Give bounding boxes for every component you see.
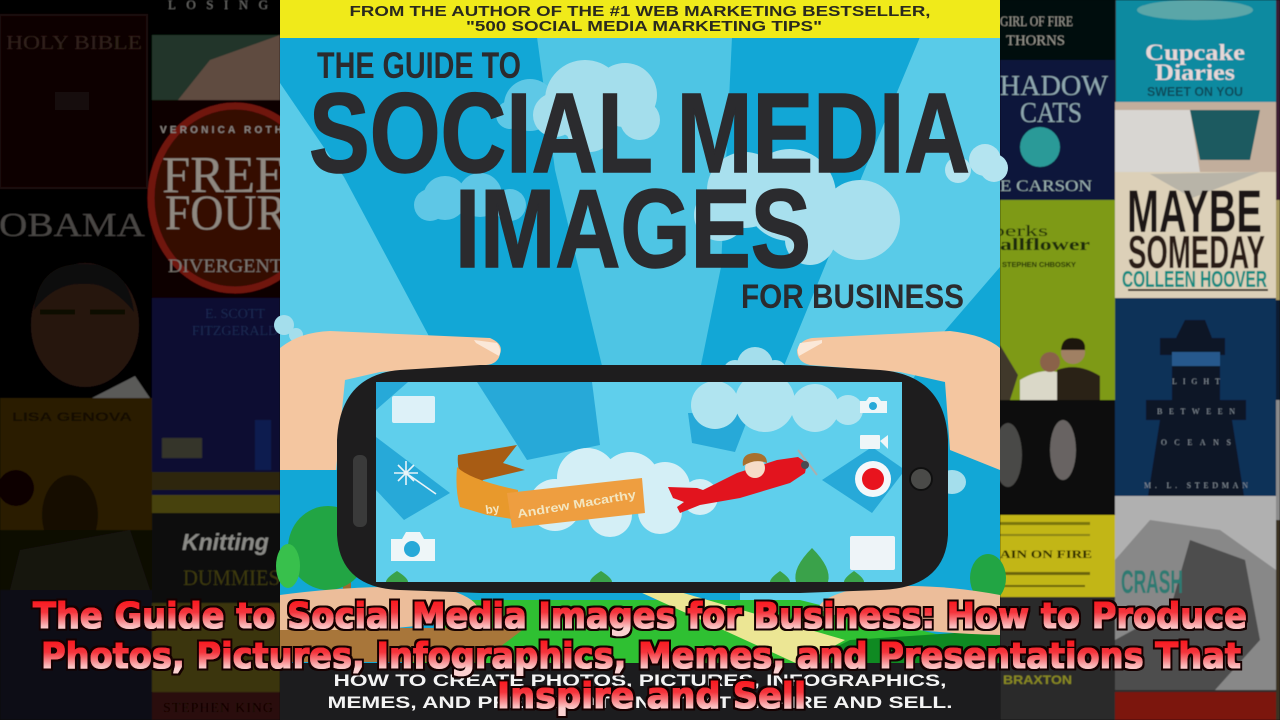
book: Knitting for Dummies [152, 495, 280, 603]
screen icon: folder [392, 396, 435, 423]
right hand [797, 331, 1000, 635]
book: lower left dark cover [0, 590, 152, 720]
cover banner: yellow endorsement: "500 SOCIAL MEDIA MARKETING TIPS" [466, 19, 822, 35]
cover title: Images: IMAGES [455, 167, 811, 291]
book: Perks of Being a Wallflower: STEPHEN CHBOSKY [1002, 262, 1076, 269]
banner: by Andrew Macarthy [456, 445, 645, 528]
book: navy novel: FITZGERALD [192, 324, 278, 339]
book: navy novel [152, 298, 280, 495]
book: Rain on Fire: AIN ON FIRE [1000, 547, 1092, 561]
book: Free Four: VERONICA ROTH [160, 125, 282, 136]
screen icon: magic wand [394, 461, 436, 494]
book: Free Four: DIVERGENT [168, 256, 282, 277]
banner: by Andrew Macarthy: by [484, 501, 501, 517]
icon: background trees [276, 470, 1006, 602]
cover banner: yellow endorsement: FROM THE AUTHOR OF THE #1 WEB MARKETING BESTSELLER, [350, 4, 930, 20]
book: The Light Between Oceans: BETWEEN [1157, 407, 1235, 416]
cover footer band [280, 663, 1000, 720]
cover footer band: HOW TO CREATE PHOTOS, PICTURES, INFOGRAPHICS, [334, 671, 946, 690]
book: Cupcake Diaries: SWEET ON YOU [1147, 84, 1243, 99]
book: Stephen King: STEPHEN KING [163, 701, 273, 716]
book: Obama: OBAMA [0, 207, 146, 244]
cloud: left edge [274, 315, 303, 342]
cover title: Social Media: SOCIAL MEDIA [309, 70, 970, 196]
cover sky with sun rays [280, 38, 1000, 575]
book: Cupcake Diaries: Diaries [1155, 60, 1235, 85]
book: Maybe Someday [1115, 102, 1277, 298]
book: Holy Bible: HOLY BIBLE [6, 32, 142, 54]
screen cloud: top right [691, 382, 863, 432]
book: navy novel: E. SCOTT [205, 307, 265, 322]
panel: left book wall [0, 0, 319, 720]
screen icon: camera left [391, 532, 435, 561]
screen icon: camera right [860, 397, 887, 413]
cloud: right edge [945, 144, 1008, 183]
book: Knitting for Dummies: DUMMIES [183, 565, 280, 590]
book: Rain on Fire [1000, 515, 1115, 597]
book: The Light Between Oceans: LIGHT [1172, 377, 1220, 386]
screen icon: record button [855, 461, 891, 497]
book: The Light Between Oceans: M. L. STEDMAN [1144, 481, 1248, 490]
book: Free Four [151, 100, 319, 298]
book: Shadow Cats: GIRL OF FIRE [1000, 14, 1073, 30]
cover title: For Business: FOR BUSINESS [741, 278, 964, 316]
video caption title: Inspire and Sell [497, 676, 806, 717]
book: The Light Between Oceans: OCEANS [1161, 438, 1231, 447]
video caption title [33, 596, 1247, 717]
book: Shadow Cats: E CARSON [1000, 178, 1093, 195]
cloud: behind Social [496, 60, 660, 152]
book: Shadow Cats: CATS [1020, 98, 1082, 129]
screen cloud: centre [529, 448, 718, 537]
book: Perks of Being a Wallflower: perks [992, 223, 1048, 240]
book: Knitting for Dummies: Knitting [182, 529, 269, 555]
left hand [280, 331, 501, 630]
book: Lisa Genova [0, 398, 152, 590]
plane with pilot [668, 450, 817, 513]
cloud: behind Images [694, 149, 900, 265]
cloud: behind phone top right [723, 347, 787, 384]
book: Crash [1115, 496, 1276, 690]
book: Braxton [1000, 597, 1115, 720]
book: Braxton: BRAXTON [1003, 673, 1072, 687]
screen icon: white square [850, 536, 895, 570]
book: Obama [0, 190, 152, 398]
book: Perks of Being a Wallflower: allflower [1000, 235, 1091, 254]
book: Cupcake Diaries: Cupcake [1145, 40, 1245, 65]
cover banner: yellow endorsement [280, 0, 1000, 38]
book: Losing [152, 0, 280, 101]
phone side slot [353, 455, 367, 527]
book: Shadow Cats [984, 0, 1115, 200]
book: Perks of Being a Wallflower [992, 200, 1115, 400]
book: Cupcake Diaries [1116, 0, 1276, 102]
book: red footer cover [1115, 692, 1276, 720]
cover footer band: MEMES, AND PRESENTATIONS THAT INSPIRE AND SELL. [328, 693, 952, 712]
cover title: The Guide To: THE GUIDE TO [317, 45, 521, 86]
book: Shadow Cats: SHADOW [984, 71, 1109, 102]
cloud: left of Images [414, 173, 526, 221]
book: Lisa Genova: LISA GENOVA [12, 410, 132, 424]
ground: green hills and path [280, 591, 1000, 663]
book: Shadow Cats: THORNS [1006, 33, 1065, 49]
screen trees [386, 548, 864, 582]
book: dark portrait cover [994, 400, 1115, 515]
book: The Light Between Oceans [1115, 298, 1276, 496]
phone home button [910, 468, 932, 490]
phone body [337, 365, 948, 593]
book: Free Four: FOUR [165, 184, 288, 240]
panel: central book cover [274, 0, 1008, 720]
book: Crash: CRASH [1121, 564, 1183, 600]
book: clipped strip at right edge [1276, 0, 1280, 720]
phone screen [376, 372, 905, 582]
book: Stephen King [152, 603, 280, 720]
panel: right book wall [984, 0, 1280, 720]
screen icon: video camera [860, 435, 888, 449]
banner: by Andrew Macarthy: Andrew Macarthy [516, 487, 637, 521]
book: Free Four: FREE [162, 147, 286, 204]
book: Holy Bible [0, 15, 147, 188]
